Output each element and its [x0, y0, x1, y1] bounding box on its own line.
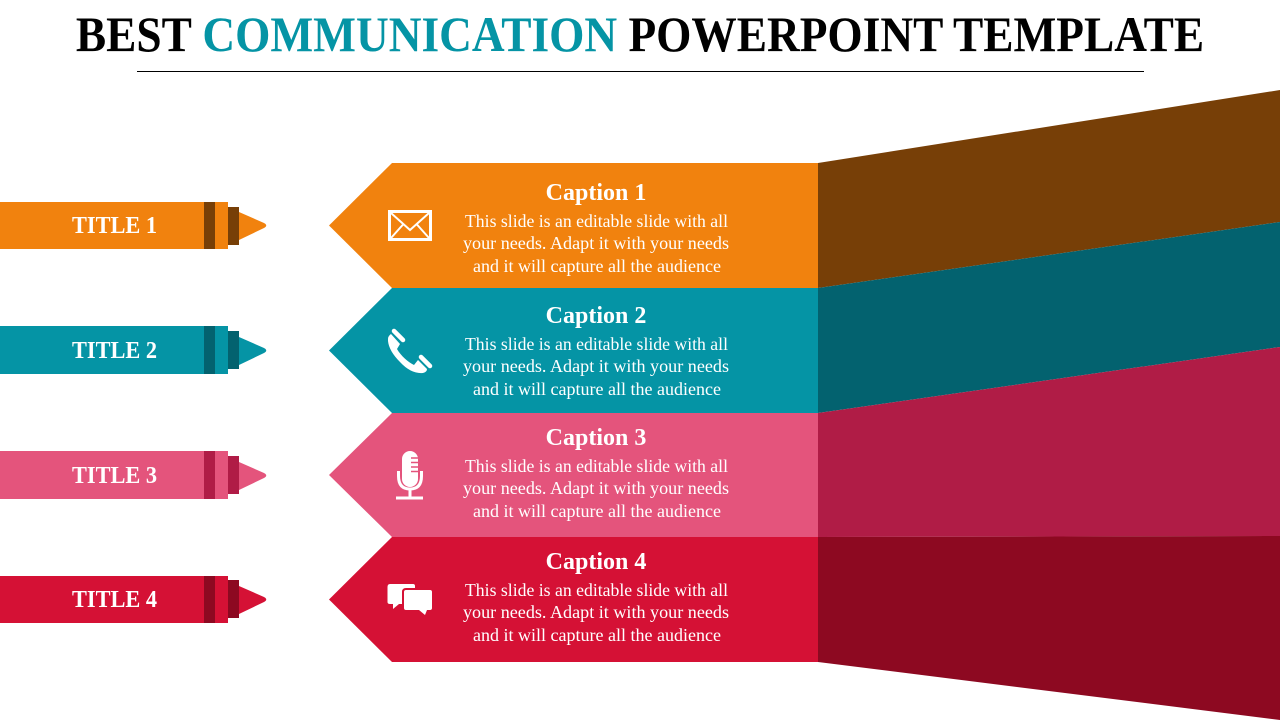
crayon 2: TITLE 2 — [72, 338, 157, 364]
caption 1 body — [463, 211, 729, 276]
caption 4 body: This slide is an editable slide with all — [465, 580, 728, 600]
panel: caption 2 — [329, 288, 818, 413]
crayon 1 — [0, 202, 266, 249]
panel: caption 4 — [329, 537, 818, 662]
band 2 — [818, 222, 1280, 413]
caption 1 body: your needs. Adapt it with your needs — [463, 233, 729, 253]
icon: microphone — [396, 451, 423, 498]
panel: caption 3 — [329, 413, 818, 537]
crayon 4: TITLE 4 — [72, 587, 157, 613]
crayon 3: TITLE 3 — [72, 463, 157, 489]
caption 2 body: your needs. Adapt it with your needs — [463, 356, 729, 376]
caption 3 heading: Caption 3 — [546, 425, 646, 451]
crayon 2 — [0, 326, 266, 374]
icon: speech bubbles — [388, 584, 432, 615]
panel: dark perspective bands — [818, 90, 1280, 720]
caption 4 body: your needs. Adapt it with your needs — [463, 602, 729, 622]
caption 2 body: and it will capture all the audience — [473, 379, 721, 399]
caption 2 body: This slide is an editable slide with all — [465, 334, 728, 354]
caption 3 body: This slide is an editable slide with all — [465, 456, 728, 476]
title: BEST COMMUNICATION POWERPOINT TEMPLATE — [76, 7, 1204, 63]
band 1 — [818, 90, 1280, 288]
caption 4 body — [463, 580, 729, 645]
caption 3 body: and it will capture all the audience — [473, 501, 721, 521]
caption 2 heading: Caption 2 — [546, 303, 646, 329]
caption 1 heading: Caption 1 — [546, 180, 646, 206]
icon: envelope — [390, 212, 430, 240]
icon: phone — [388, 331, 430, 373]
caption 3 body: your needs. Adapt it with your needs — [463, 478, 729, 498]
caption 2 body — [463, 334, 729, 399]
crayon 4 — [0, 576, 266, 623]
caption 4 body: and it will capture all the audience — [473, 625, 721, 645]
caption 1 body: This slide is an editable slide with all — [465, 211, 728, 231]
caption 3 body — [463, 456, 729, 521]
caption 1 body: and it will capture all the audience — [473, 256, 721, 276]
band 4 — [818, 536, 1280, 720]
crayon 3 — [0, 451, 266, 499]
band 3 — [818, 347, 1280, 537]
crayon 1: TITLE 1 — [72, 213, 157, 239]
panel: caption 1 — [329, 163, 818, 288]
caption 4 heading: Caption 4 — [546, 549, 646, 575]
